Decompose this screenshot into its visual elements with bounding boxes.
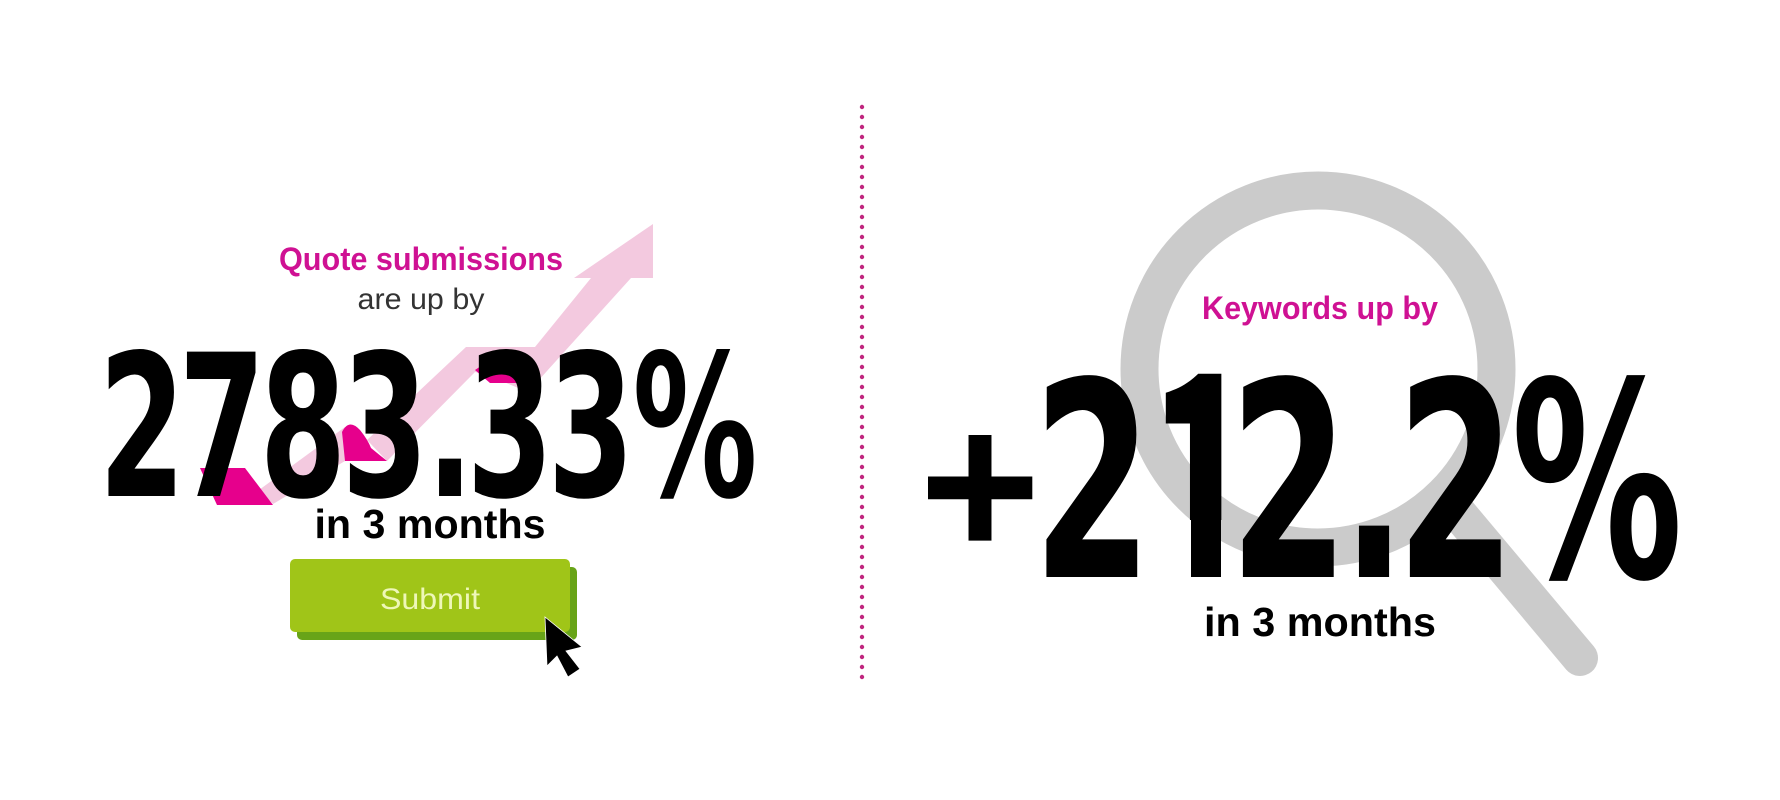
- text: in 3 months: in 3 months: [314, 501, 546, 547]
- icon: rising ribbon arrow: [200, 224, 653, 505]
- heading: quote submissions: Quote submissions: [279, 241, 563, 277]
- icon: magnifying glass: [1140, 190, 1580, 658]
- text: are up by: are up by: [358, 283, 484, 316]
- big number: +212.2%: 1: [1148, 254, 1256, 658]
- panel: quote submissions: [99, 224, 758, 677]
- heading: keywords up by: Keywords up by: [1202, 290, 1438, 326]
- big number: 2783.33%: 2783.33%: [99, 313, 758, 544]
- text: in 3 months: in 3 months: [1204, 599, 1436, 645]
- big number: +212.2%: 2: [1033, 325, 1152, 642]
- big number: +212.2%: 2.2%: [1229, 325, 1683, 642]
- icon: mouse cursor: [545, 617, 582, 677]
- divider: dotted line: [860, 107, 864, 685]
- button: submit: Submit: [380, 583, 481, 616]
- panel: keywords: [919, 190, 1683, 658]
- button: submit: [290, 559, 577, 640]
- big number: +212.2%: +: [919, 370, 1041, 602]
- big number: +212.2%: [928, 374, 1678, 581]
